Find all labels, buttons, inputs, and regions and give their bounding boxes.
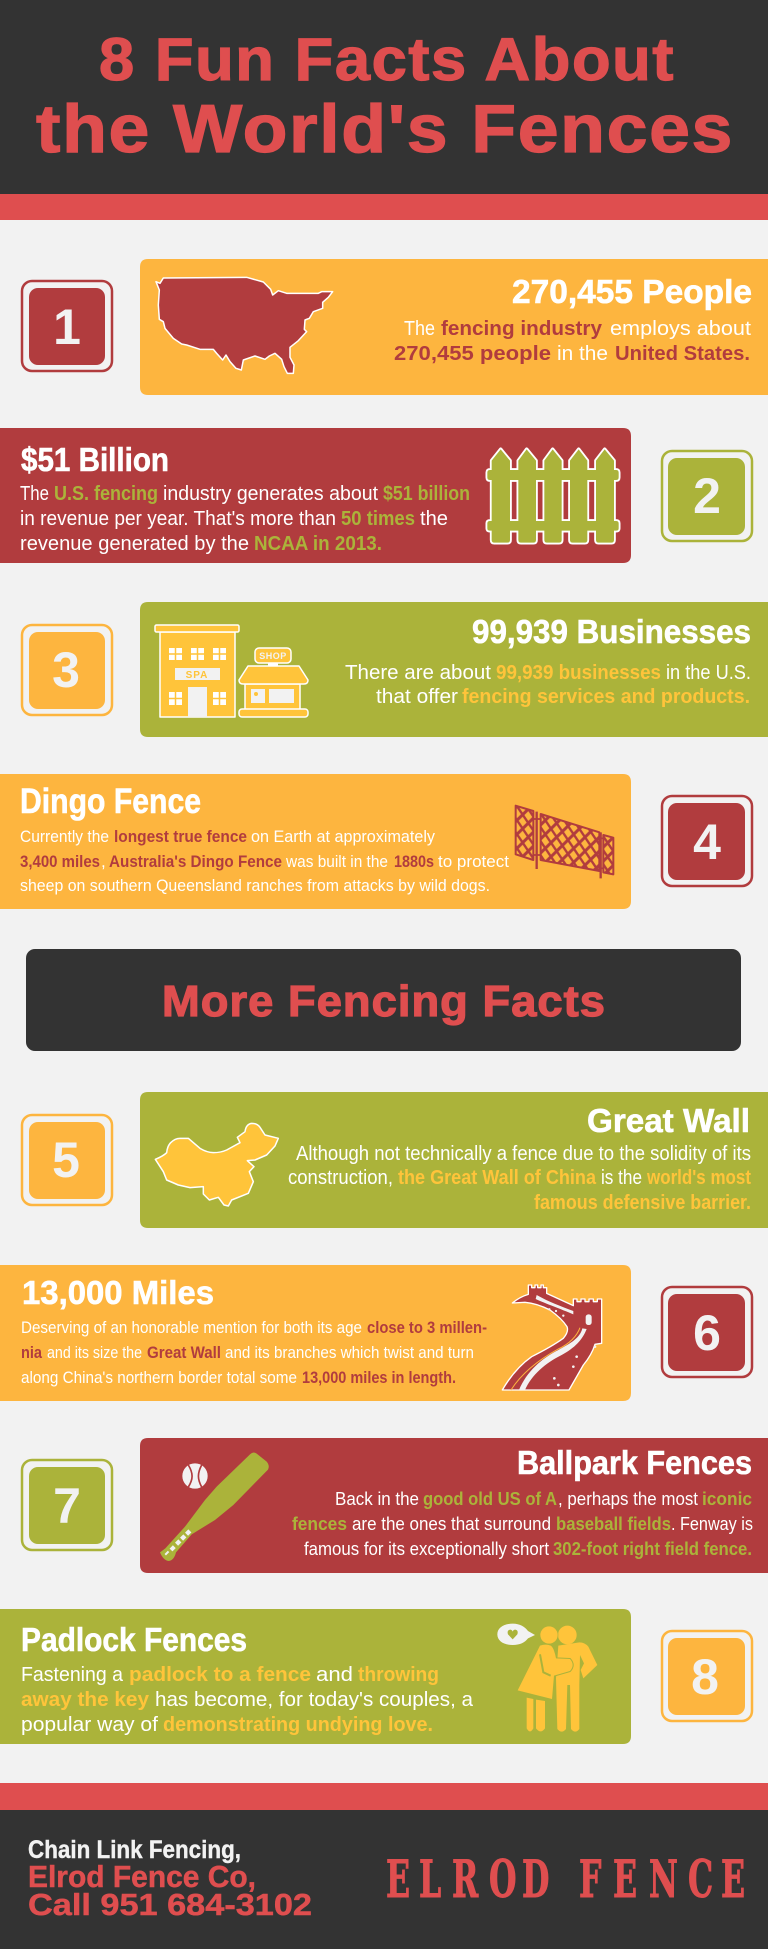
- logo wordmark: ELROD FENCE: [386, 1850, 745, 1910]
- body text: Currently the: [20, 827, 109, 846]
- body text: industry generates about: [163, 483, 378, 505]
- body text: the Great Wall of China: [398, 1167, 597, 1189]
- body text: 1880s: [394, 852, 434, 871]
- footer contact text: [28, 1836, 312, 1922]
- body text: famous for its exceptionally short: [304, 1539, 549, 1559]
- badge 2: [662, 451, 752, 541]
- panel 7: ballpark fences: [140, 1438, 768, 1573]
- body text: 13,000 miles in length.: [302, 1368, 456, 1387]
- footer: [0, 1783, 768, 1949]
- footer contact text: Chain Link Fencing,: [28, 1836, 241, 1864]
- body text: There are about: [345, 662, 491, 684]
- body text: , perhaps the most: [558, 1489, 698, 1509]
- body text: away the key: [21, 1689, 150, 1711]
- body text: and: [316, 1664, 353, 1686]
- heading: $51 Billion: [21, 441, 169, 478]
- panel 3: 99,939 businesses: [140, 602, 768, 737]
- body text: are the ones that surround: [352, 1514, 551, 1534]
- icon: great wall: [502, 1285, 602, 1390]
- badge 1: [22, 281, 112, 371]
- body text: 302-foot right field fence.: [553, 1539, 752, 1559]
- body text: 99,939 businesses: [496, 662, 661, 684]
- icon: speech bubble with heart: [497, 1624, 535, 1645]
- icon: picket fence: [487, 449, 619, 543]
- badge 7: [22, 1460, 112, 1550]
- body text: world's most: [646, 1167, 751, 1189]
- panel 2: $51 billion: [0, 428, 631, 563]
- body text: Back in the: [335, 1489, 419, 1509]
- body text: employs about: [610, 318, 751, 340]
- icon: baseball bat: [160, 1452, 269, 1561]
- body text: in revenue per year. That's more than: [20, 508, 336, 530]
- body text: Australia's Dingo Fence: [109, 852, 282, 871]
- body text: [21, 1664, 474, 1736]
- body text: on Earth at approximately: [251, 827, 435, 846]
- badge 4: [662, 796, 752, 886]
- body text: popular way of: [21, 1714, 158, 1736]
- body text: 270,455 people: [394, 343, 551, 365]
- body text: good old US of A: [423, 1489, 557, 1509]
- badge 4: 4: [693, 814, 721, 870]
- icon: buildings: SPA: [186, 670, 208, 681]
- body text: fences: [292, 1514, 347, 1534]
- icon: baseball: [182, 1463, 208, 1489]
- body text: Great Wall: [147, 1343, 221, 1362]
- body text: that offer: [376, 686, 458, 708]
- section banner: More Fencing Facts: [162, 977, 606, 1026]
- icon: China map: [155, 1123, 278, 1206]
- body text: 3,400 miles: [20, 852, 100, 871]
- body text: [345, 662, 751, 708]
- body text: construction,: [288, 1167, 393, 1189]
- title line 2: the World's Fences: [36, 91, 734, 167]
- panel 1: 270,455 people: [140, 259, 768, 395]
- heading: Great Wall: [587, 1102, 750, 1139]
- heading: 13,000 Miles: [22, 1274, 214, 1311]
- body text: to protect: [438, 852, 509, 871]
- body text: was built in the: [285, 852, 388, 871]
- heading: Padlock Fences: [21, 1621, 247, 1658]
- body text: [288, 1143, 751, 1214]
- body text: and its size the: [47, 1343, 142, 1362]
- body text: [20, 483, 470, 555]
- badge 3: 3: [52, 642, 80, 698]
- badge 5: 5: [52, 1132, 80, 1188]
- body text: close to 3 millen-: [367, 1318, 487, 1337]
- body text: the: [420, 508, 448, 530]
- body text: in the: [557, 343, 608, 365]
- badge 6: 6: [693, 1305, 721, 1361]
- body text: The: [404, 318, 435, 340]
- footer contact text: Elrod Fence Co,: [28, 1859, 256, 1894]
- body text: demonstrating undying love.: [163, 1714, 433, 1736]
- icon: couple: [518, 1626, 597, 1732]
- body text: $51 billion: [383, 483, 470, 505]
- heading: 99,939 Businesses: [472, 613, 751, 650]
- body text: revenue generated by the: [20, 533, 249, 555]
- body text: is the: [601, 1167, 642, 1189]
- body text: nia: [21, 1343, 42, 1362]
- body text: ,: [101, 852, 106, 871]
- badge 3: [22, 625, 112, 715]
- panel 4: dingo fence: [0, 774, 631, 909]
- icon: buildings: [155, 625, 308, 717]
- body text: Deserving of an honorable mention for both its age: [21, 1318, 362, 1337]
- heading: Dingo Fence: [20, 782, 201, 821]
- body text: sheep on southern Queensland ranches from attacks by wild dogs.: [20, 876, 490, 895]
- badge 8: 8: [691, 1649, 719, 1705]
- icon: lattice fence: [516, 806, 613, 878]
- heading: Ballpark Fences: [517, 1444, 752, 1481]
- body text: Fastening a: [21, 1664, 124, 1686]
- title line 1: 8 Fun Facts About: [99, 26, 675, 93]
- body text: iconic: [702, 1489, 752, 1509]
- section banner: [26, 949, 741, 1051]
- icon: buildings: SHOP: [259, 651, 287, 661]
- body text: 50 times: [341, 508, 415, 530]
- body text: has become, for today's couples, a: [155, 1689, 474, 1711]
- body text: fencing industry: [441, 318, 603, 340]
- body text: The: [20, 483, 49, 505]
- badge 2: 2: [693, 468, 721, 524]
- badge 6: [662, 1287, 752, 1377]
- body text: padlock to a fence: [129, 1664, 311, 1686]
- heading: 270,455 People: [512, 273, 752, 310]
- body text: NCAA in 2013.: [254, 533, 382, 555]
- panel 6: 13,000 miles: [0, 1265, 631, 1401]
- red stripe: [0, 194, 768, 220]
- badge 7: 7: [53, 1478, 81, 1534]
- footer contact text: Call 951 684-3102: [28, 1887, 312, 1922]
- body text: U.S. fencing: [54, 483, 158, 505]
- body text: baseball fields: [556, 1514, 671, 1534]
- badge 5: [22, 1115, 112, 1205]
- badge 8: [662, 1631, 752, 1721]
- body text: [20, 827, 509, 895]
- body text: fencing services and products.: [462, 686, 750, 708]
- icon: USA map: [156, 277, 333, 373]
- panel 5: great wall: [140, 1092, 768, 1228]
- body text: along China's northern border total some: [21, 1368, 297, 1387]
- badge 1: 1: [53, 299, 81, 355]
- body text: and its branches which twist and turn: [225, 1343, 474, 1362]
- body text: [292, 1489, 753, 1559]
- body text: in the U.S.: [666, 662, 751, 684]
- body text: throwing: [358, 1664, 439, 1686]
- body text: . Fenway is: [671, 1514, 753, 1534]
- body text: [394, 318, 751, 365]
- body text: longest true fence: [114, 827, 247, 846]
- body text: [21, 1318, 487, 1387]
- header band: [0, 0, 768, 220]
- panel 8: padlock fences: [0, 1609, 631, 1744]
- body text: United States.: [615, 343, 750, 365]
